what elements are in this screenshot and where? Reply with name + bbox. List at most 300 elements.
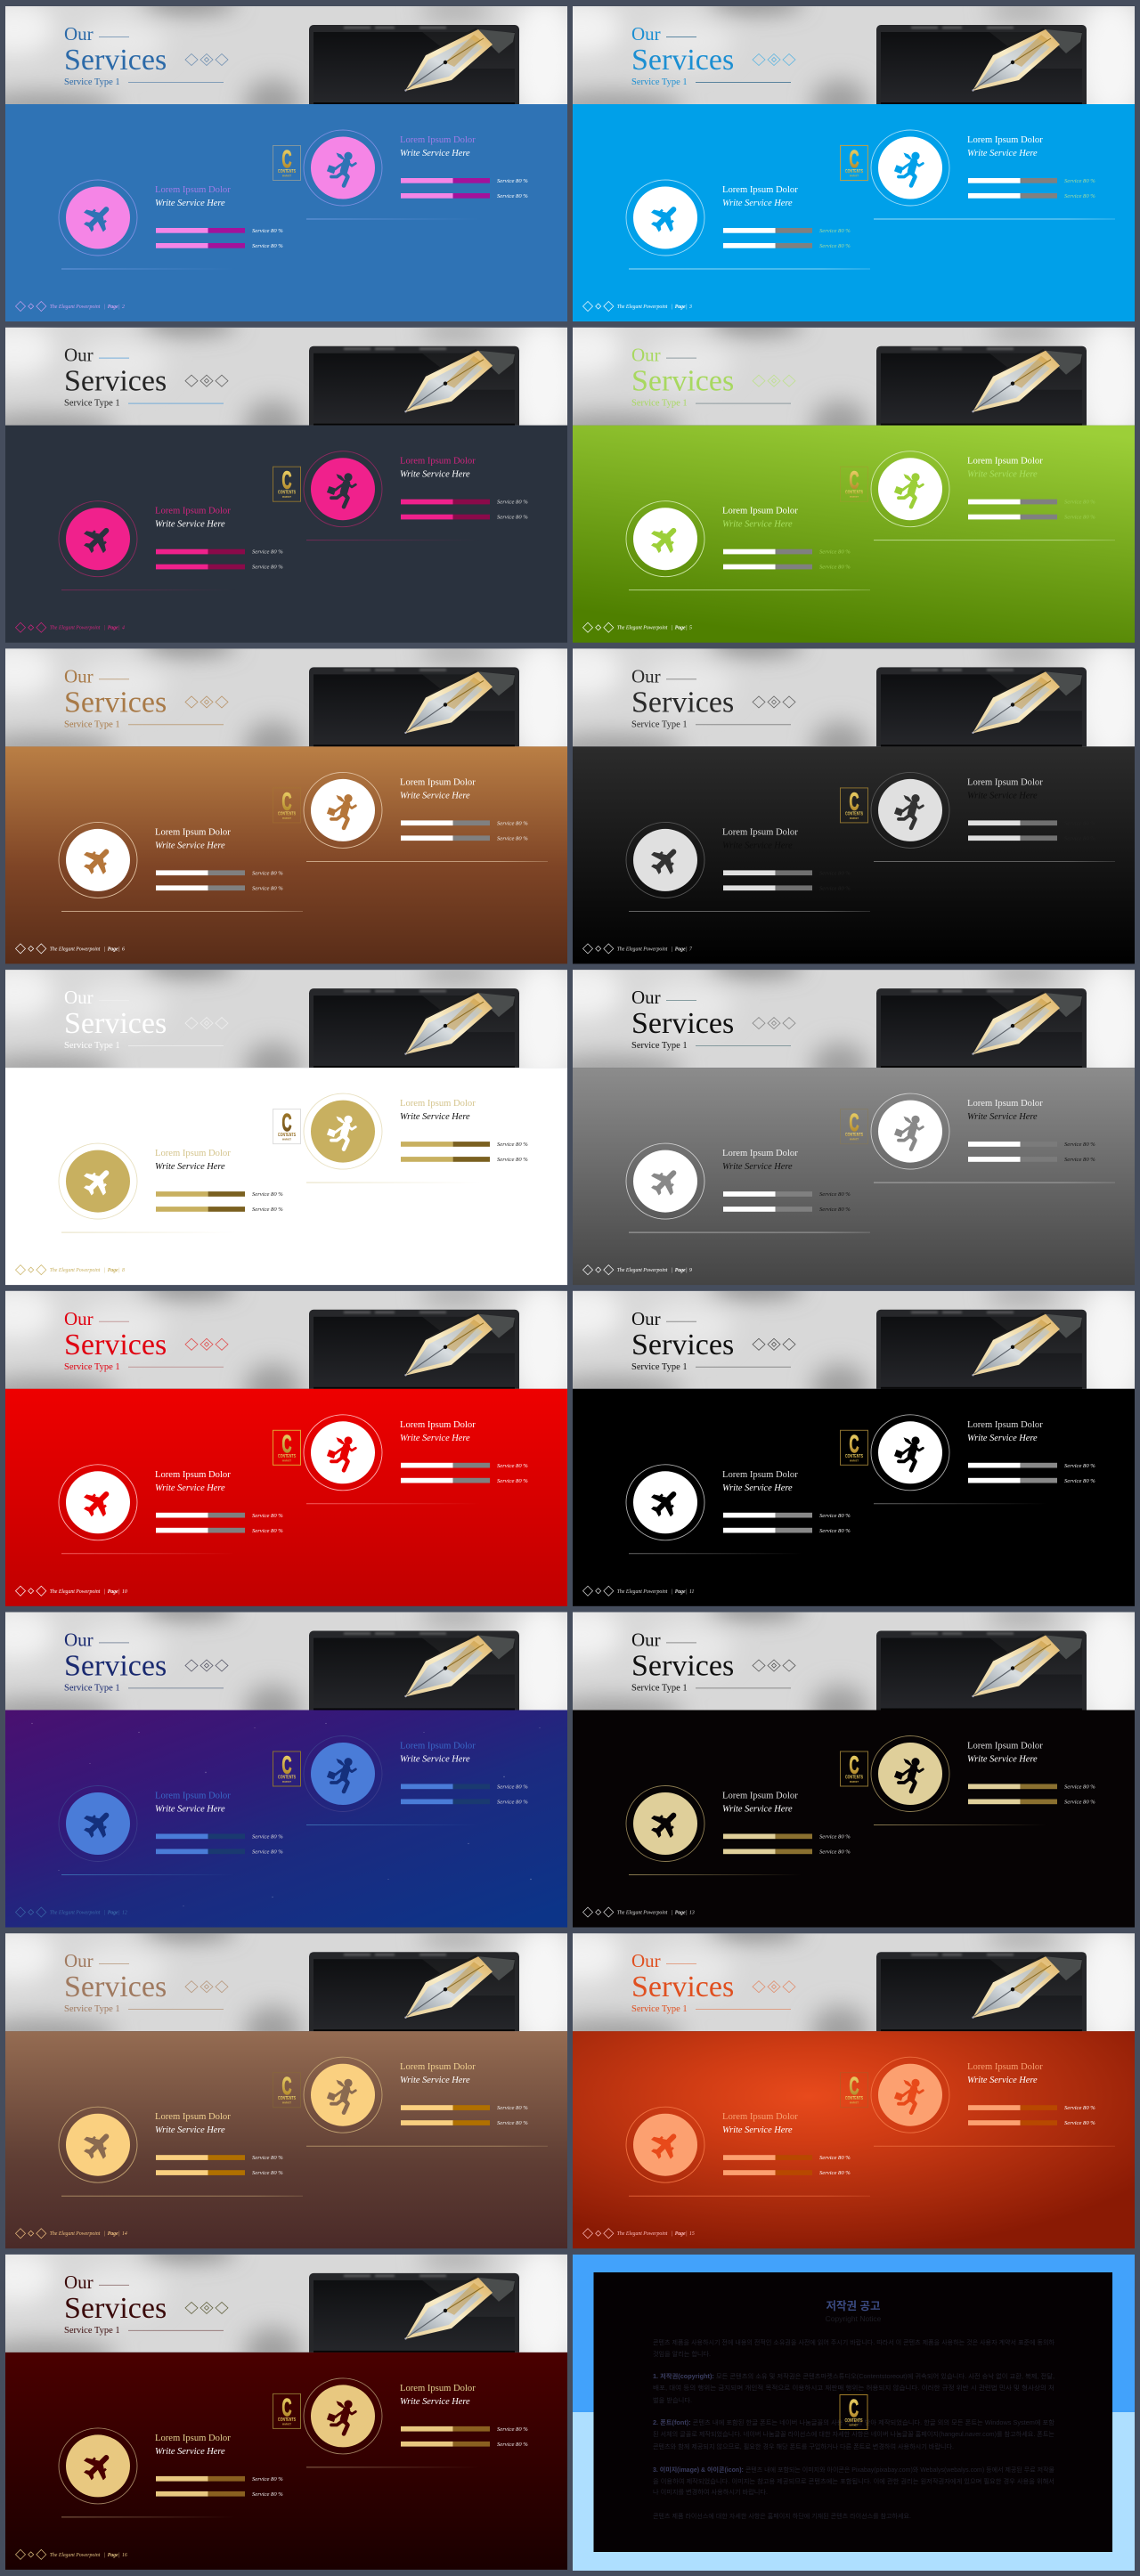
runner badge bbox=[871, 1736, 949, 1811]
heading: Lorem Ipsum Dolor bbox=[155, 827, 231, 837]
progress bars: Service 80 % bbox=[819, 1849, 851, 1856]
logo: MARKET bbox=[282, 1780, 291, 1784]
title block: Our bbox=[631, 1950, 661, 1971]
runner badge bbox=[304, 451, 382, 527]
title block: Service Type 1 bbox=[64, 719, 120, 729]
progress bars: Service 80 % bbox=[819, 1513, 851, 1519]
title block bbox=[64, 665, 224, 729]
title block: Service Type 1 bbox=[64, 399, 120, 409]
logo: C bbox=[850, 1430, 859, 1458]
progress bars: Service 80 % bbox=[252, 2476, 283, 2483]
title block: Services bbox=[64, 2292, 167, 2325]
logo: C bbox=[281, 145, 292, 173]
title block bbox=[631, 665, 791, 729]
laptop with pen nib bbox=[309, 988, 519, 1068]
body panel bbox=[573, 1389, 1135, 1606]
title block bbox=[631, 23, 791, 87]
progress bars: Service 80 % bbox=[497, 2426, 528, 2433]
plane badge bbox=[59, 180, 137, 256]
footer: | bbox=[686, 947, 688, 952]
laptop with pen nib bbox=[876, 1631, 1087, 1710]
heading: Lorem Ipsum Dolor bbox=[155, 1470, 231, 1480]
subtitle: Write Service Here bbox=[400, 1112, 470, 1122]
subtitle: Write Service Here bbox=[400, 1434, 470, 1443]
header background bbox=[542, 636, 1140, 771]
header background bbox=[542, 957, 1140, 1093]
notice body text: 것임을 알리는 합니다. bbox=[653, 2350, 711, 2358]
service block: plane bbox=[626, 180, 870, 269]
service block: plane bbox=[626, 822, 870, 912]
title block: Our bbox=[631, 345, 661, 366]
footer: The Elegant Powerpoint bbox=[617, 947, 668, 952]
laptop with pen nib bbox=[309, 1631, 519, 1710]
title block bbox=[64, 345, 224, 409]
laptop with pen nib bbox=[876, 346, 1087, 426]
heading: Lorem Ipsum Dolor bbox=[155, 185, 231, 195]
runner badge bbox=[304, 1736, 382, 1811]
heading: Lorem Ipsum Dolor bbox=[722, 185, 798, 195]
service block: plane bbox=[59, 1465, 303, 1554]
logo bbox=[841, 467, 867, 501]
footer: Page bbox=[675, 2231, 686, 2237]
title block: Services bbox=[64, 1329, 167, 1361]
body panel bbox=[573, 104, 1135, 321]
slide: page 15 orange bbox=[542, 1921, 1140, 2248]
footer: 3 bbox=[688, 305, 692, 310]
footer bbox=[16, 2229, 127, 2239]
footer bbox=[582, 301, 692, 312]
title block: Services bbox=[631, 44, 734, 77]
service block: runner bbox=[871, 1093, 1115, 1183]
title block: Our bbox=[631, 1629, 661, 1651]
logo: CONTENTS bbox=[845, 491, 863, 496]
plane badge bbox=[626, 180, 704, 256]
footer: The Elegant Powerpoint bbox=[617, 626, 668, 631]
plane badge bbox=[626, 1465, 704, 1540]
subtitle: Write Service Here bbox=[400, 1754, 470, 1765]
diamond ornament bbox=[185, 53, 228, 66]
notice body text: 된 서체의 글꼴로 제작되었습니다. 네이버 나눔글꼴 라이선스에 대한 자세한 사항은 네이버 나눔글꼴 홈페이지(hangeul.naver.com)를 참고하세요. 폰트는 bbox=[653, 2430, 1055, 2438]
service block: plane bbox=[626, 501, 870, 590]
service block: runner bbox=[304, 2378, 548, 2467]
footer: 6 bbox=[122, 947, 125, 952]
footer: Page bbox=[108, 626, 118, 631]
notice body text: 콘텐츠 제품을 사용하시기 전에 내용의 전적인 소유권을 사전에 읽어 주시기 바랍니다. 따라서 이 콘텐츠 제품을 사용하는 것은 사용자 계약서 표준에 동의하 bbox=[653, 2338, 1055, 2346]
progress bars: Service 80 % bbox=[1064, 193, 1095, 199]
title block: Service Type 1 bbox=[64, 2326, 120, 2336]
footer: Page bbox=[675, 1911, 686, 1916]
footer: Page bbox=[675, 1268, 686, 1273]
footer: Page bbox=[108, 1589, 118, 1595]
footer bbox=[16, 301, 125, 312]
footer: Page bbox=[675, 1589, 686, 1595]
title block: Services bbox=[631, 1007, 734, 1040]
progress bars: Service 80 % bbox=[252, 243, 283, 249]
footer bbox=[582, 1907, 695, 1917]
title block bbox=[64, 23, 224, 87]
logo bbox=[841, 1430, 867, 1465]
service block: runner bbox=[871, 451, 1115, 540]
two-tone blue backdrop bbox=[573, 2255, 1135, 2571]
slide: page 9 gray bbox=[542, 957, 1140, 1285]
progress bars: Service 80 % bbox=[497, 2105, 528, 2111]
footer: Page bbox=[108, 2231, 118, 2237]
footer bbox=[582, 1265, 692, 1275]
notice body text: 나 이미지를 변경하여 사용하시기 바랍니다. bbox=[653, 2488, 768, 2496]
progress bars: Service 80 % bbox=[497, 1463, 528, 1469]
plane badge bbox=[59, 501, 137, 577]
heading: Lorem Ipsum Dolor bbox=[722, 827, 798, 837]
logo bbox=[841, 145, 867, 180]
runner badge bbox=[871, 130, 949, 206]
subtitle: Write Service Here bbox=[722, 2125, 793, 2135]
progress bars: Service 80 % bbox=[819, 228, 851, 234]
progress bars: Service 80 % bbox=[819, 2170, 851, 2176]
diamond ornament bbox=[185, 1981, 228, 1993]
subtitle: Write Service Here bbox=[967, 791, 1038, 800]
title block bbox=[631, 1308, 791, 1372]
heading: Lorem Ipsum Dolor bbox=[155, 507, 231, 516]
logo: CONTENTS bbox=[845, 1776, 863, 1781]
heading: Lorem Ipsum Dolor bbox=[967, 777, 1043, 787]
title block: Our bbox=[64, 987, 94, 1008]
footer bbox=[16, 2549, 127, 2559]
header background bbox=[542, 1279, 1140, 1414]
title block: Services bbox=[631, 686, 734, 719]
title block: Service Type 1 bbox=[64, 1041, 120, 1051]
service block: runner bbox=[871, 1736, 1115, 1825]
service block: plane bbox=[59, 2107, 303, 2197]
title block: Service Type 1 bbox=[631, 399, 688, 409]
black notice panel bbox=[593, 2272, 1112, 2552]
title block: Service Type 1 bbox=[631, 77, 688, 87]
progress bars: Service 80 % bbox=[497, 835, 528, 841]
progress bars: Service 80 % bbox=[497, 515, 528, 521]
laptop with pen nib bbox=[876, 1952, 1087, 2031]
slide: page 3 cyan bbox=[542, 0, 1140, 321]
title block: Our bbox=[64, 2271, 94, 2293]
progress bars bbox=[723, 1191, 851, 1213]
logo: MARKET bbox=[850, 1459, 859, 1462]
title block bbox=[64, 1629, 224, 1694]
title block: Services bbox=[631, 1649, 734, 1683]
logo: CONTENTS bbox=[845, 811, 863, 817]
progress bars: Service 80 % bbox=[252, 2170, 283, 2176]
subtitle: Write Service Here bbox=[155, 841, 225, 850]
service block: plane bbox=[59, 1786, 303, 1875]
laptop with pen nib bbox=[876, 1310, 1087, 1389]
body panel bbox=[573, 1710, 1135, 1927]
footer: 10 bbox=[122, 1589, 127, 1595]
body panel bbox=[573, 426, 1135, 643]
logo: MARKET bbox=[850, 2424, 859, 2427]
laptop with pen nib bbox=[876, 988, 1087, 1068]
heading: Lorem Ipsum Dolor bbox=[400, 777, 476, 787]
slide: page 11 black bbox=[542, 1279, 1140, 1606]
logo bbox=[841, 2072, 867, 2108]
progress bars bbox=[968, 1463, 1095, 1484]
laptop with pen nib bbox=[309, 1310, 519, 1389]
logo bbox=[273, 2072, 301, 2108]
footer: Page bbox=[675, 626, 686, 631]
title block: Our bbox=[64, 1308, 94, 1329]
logo: MARKET bbox=[282, 495, 291, 499]
logo bbox=[273, 145, 301, 180]
footer: 12 bbox=[122, 1911, 127, 1916]
logo bbox=[273, 1109, 301, 1144]
footer bbox=[582, 944, 693, 954]
slide: page 4 charcoal and pink bbox=[0, 315, 580, 643]
logo: MARKET bbox=[282, 1138, 291, 1142]
footer: 14 bbox=[122, 2231, 127, 2237]
slide: copyright notice bbox=[573, 2255, 1135, 2571]
progress bars: Service 80 % bbox=[252, 1207, 283, 1213]
subtitle: Write Service Here bbox=[722, 1804, 793, 1815]
title block: Our bbox=[64, 665, 94, 687]
footer: The Elegant Powerpoint bbox=[50, 2553, 101, 2558]
logo: C bbox=[850, 2072, 859, 2100]
service block: runner bbox=[871, 772, 1115, 862]
diamond ornament bbox=[185, 2302, 228, 2313]
footer: The Elegant Powerpoint bbox=[617, 1268, 668, 1273]
progress bars bbox=[401, 1784, 528, 1806]
progress bars: Service 80 % bbox=[1064, 820, 1095, 826]
title block bbox=[631, 345, 791, 409]
header background bbox=[0, 315, 580, 451]
progress bars: Service 80 % bbox=[819, 565, 851, 571]
progress bars bbox=[401, 2426, 528, 2448]
title block bbox=[64, 1308, 224, 1372]
header background bbox=[0, 2242, 580, 2377]
runner badge bbox=[871, 2057, 949, 2133]
diamond ornament bbox=[185, 1338, 228, 1350]
title block: Services bbox=[631, 1329, 734, 1361]
header background bbox=[542, 1921, 1140, 2056]
subtitle: Write Service Here bbox=[155, 199, 225, 208]
progress bars bbox=[968, 820, 1095, 841]
logo: MARKET bbox=[850, 1138, 859, 1142]
heading: Lorem Ipsum Dolor bbox=[155, 2112, 231, 2122]
logo bbox=[841, 1109, 867, 1144]
progress bars: Service 80 % bbox=[1064, 500, 1095, 506]
notice body text: 1. 저작권(copyright): 모든 콘텐츠의 소유 및 저작권은 콘텐츠마켓스튜디오(Contentstoreout)에 귀속되어 있습니다. 사전 승낙 없이 교환, 복제, 전달, bbox=[653, 2372, 1054, 2380]
progress bars bbox=[723, 549, 851, 571]
subtitle: Write Service Here bbox=[967, 2076, 1038, 2085]
service block: plane bbox=[626, 1786, 870, 1875]
progress bars bbox=[156, 870, 283, 891]
footer: 8 bbox=[122, 1268, 125, 1273]
logo: CONTENTS bbox=[278, 491, 296, 496]
runner badge bbox=[871, 451, 949, 527]
footer: | bbox=[686, 1911, 688, 1916]
runner badge bbox=[871, 1093, 949, 1169]
title block bbox=[631, 1950, 791, 2014]
title block: Our bbox=[631, 987, 661, 1008]
progress bars: Service 80 % bbox=[252, 228, 283, 234]
heading: Lorem Ipsum Dolor bbox=[400, 135, 476, 145]
progress bars: Service 80 % bbox=[1064, 1784, 1095, 1790]
progress bars: Service 80 % bbox=[252, 1834, 283, 1840]
footer: Page bbox=[108, 305, 118, 310]
footer: | bbox=[686, 305, 688, 310]
progress bars: Service 80 % bbox=[819, 549, 851, 556]
body panel bbox=[573, 1068, 1135, 1285]
progress bars bbox=[968, 500, 1095, 521]
logo: CONTENTS bbox=[845, 1454, 863, 1459]
footer: | bbox=[672, 1911, 673, 1916]
progress bars: Service 80 % bbox=[819, 885, 851, 891]
footer: 7 bbox=[689, 947, 693, 952]
plane badge bbox=[59, 1143, 137, 1219]
notice body text: 콘텐츠와 함께 제공되지 않으므로, 필요한 경우 해당 폰트를 구입하거나 다른 폰트로 변경하여 사용하시기 바랍니다. bbox=[653, 2442, 954, 2450]
footer: The Elegant Powerpoint bbox=[50, 626, 101, 631]
title block bbox=[631, 987, 791, 1051]
heading: Lorem Ipsum Dolor bbox=[400, 457, 476, 467]
subtitle: Write Service Here bbox=[155, 1804, 225, 1815]
progress bars: Service 80 % bbox=[1064, 835, 1095, 841]
heading: Lorem Ipsum Dolor bbox=[722, 2112, 798, 2122]
title block: Our bbox=[64, 1950, 94, 1971]
progress bars bbox=[401, 178, 528, 199]
footer: | bbox=[118, 1911, 120, 1916]
service block: plane bbox=[626, 1465, 870, 1554]
footer: The Elegant Powerpoint bbox=[50, 1911, 101, 1916]
service block: runner bbox=[871, 2057, 1115, 2147]
notice body text: 2. 폰트(font): 콘텐츠 내에 포함된 한글 폰트는 네이버 나눔글꼴의 사용 허가를 받아 제작되었습니다. 한글 외의 모든 폰트는 Windows System에 포함 bbox=[653, 2418, 1055, 2426]
slide: page 6 brown bbox=[0, 636, 580, 963]
header background bbox=[0, 957, 580, 1093]
title block: Services bbox=[64, 1971, 167, 2003]
logo: MARKET bbox=[282, 175, 291, 178]
subtitle: Write Service Here bbox=[155, 1483, 225, 1493]
laptop with pen nib bbox=[309, 2273, 519, 2353]
footer: Page bbox=[108, 947, 118, 952]
notice body text: 벌을 받습니다. bbox=[653, 2396, 692, 2404]
footer bbox=[16, 622, 125, 632]
progress bars: Service 80 % bbox=[1064, 1478, 1095, 1484]
progress bars: Service 80 % bbox=[252, 885, 283, 891]
logo: MARKET bbox=[282, 1459, 291, 1462]
header background bbox=[0, 1279, 580, 1414]
footer: The Elegant Powerpoint bbox=[50, 2231, 101, 2237]
title block bbox=[64, 987, 224, 1051]
progress bars: Service 80 % bbox=[252, 1528, 283, 1534]
logo: CONTENTS bbox=[278, 1454, 296, 1459]
subtitle: Write Service Here bbox=[722, 520, 793, 530]
footer: 2 bbox=[122, 305, 125, 310]
logo: C bbox=[281, 1751, 292, 1779]
slide: page 7 black gradient bbox=[542, 636, 1140, 963]
footer: The Elegant Powerpoint bbox=[617, 1911, 668, 1916]
logo: CONTENTS bbox=[844, 2418, 863, 2424]
progress bars: Service 80 % bbox=[497, 193, 528, 199]
progress bars: Service 80 % bbox=[252, 2155, 283, 2161]
progress bars bbox=[156, 549, 283, 571]
progress bars: Service 80 % bbox=[497, 1157, 528, 1163]
progress bars: Service 80 % bbox=[252, 870, 283, 876]
body panel bbox=[5, 1068, 567, 1285]
footer: | bbox=[672, 1268, 673, 1273]
progress bars: Service 80 % bbox=[497, 178, 528, 184]
runner badge bbox=[304, 2378, 382, 2454]
subtitle: Write Service Here bbox=[967, 149, 1038, 158]
progress bars: Service 80 % bbox=[497, 2120, 528, 2126]
logo bbox=[841, 787, 867, 823]
footer: Page bbox=[675, 305, 686, 310]
logo: C bbox=[849, 2394, 859, 2422]
body panel bbox=[5, 1389, 567, 1606]
footer: | bbox=[672, 1589, 673, 1595]
logo: CONTENTS bbox=[278, 2096, 296, 2101]
footer: | bbox=[686, 2231, 688, 2237]
heading: Lorem Ipsum Dolor bbox=[400, 2062, 476, 2072]
title block: Service Type 1 bbox=[631, 719, 688, 729]
plane badge bbox=[626, 1143, 704, 1219]
logo: MARKET bbox=[850, 175, 859, 178]
header background bbox=[542, 315, 1140, 451]
heading: Lorem Ipsum Dolor bbox=[722, 1149, 798, 1158]
logo: C bbox=[281, 1430, 292, 1458]
footer: The Elegant Powerpoint bbox=[617, 2231, 668, 2237]
body panel bbox=[5, 104, 567, 321]
progress bars: Service 80 % bbox=[497, 500, 528, 506]
title block: Service Type 1 bbox=[631, 1041, 688, 1051]
service block: plane bbox=[626, 2107, 870, 2197]
subtitle: Write Service Here bbox=[722, 1162, 793, 1172]
header background bbox=[0, 0, 580, 129]
service block: runner bbox=[871, 130, 1115, 219]
footer: The Elegant Powerpoint bbox=[50, 947, 101, 952]
progress bars: Service 80 % bbox=[252, 565, 283, 571]
footer: | bbox=[686, 626, 688, 631]
logo: MARKET bbox=[850, 495, 859, 499]
progress bars: Service 80 % bbox=[819, 2155, 851, 2161]
progress bars bbox=[401, 1142, 528, 1163]
logo: CONTENTS bbox=[278, 2418, 296, 2423]
body panel bbox=[5, 746, 567, 963]
footer: Page bbox=[108, 1268, 118, 1273]
runner badge bbox=[304, 1093, 382, 1169]
progress bars bbox=[401, 1463, 528, 1484]
progress bars bbox=[968, 178, 1095, 199]
progress bars bbox=[156, 228, 283, 249]
progress bars bbox=[156, 1834, 283, 1856]
title block: Our bbox=[631, 665, 661, 687]
heading: Lorem Ipsum Dolor bbox=[155, 1792, 231, 1800]
title block: Services bbox=[631, 1971, 734, 2003]
heading: Lorem Ipsum Dolor bbox=[722, 507, 798, 516]
logo: C bbox=[850, 787, 859, 815]
slide: page 5 green bbox=[542, 315, 1140, 643]
heading: Lorem Ipsum Dolor bbox=[722, 1792, 798, 1800]
footer: 9 bbox=[689, 1268, 692, 1273]
progress bars: Service 80 % bbox=[819, 1207, 851, 1213]
footer: 4 bbox=[122, 625, 125, 631]
slide: page 16 maroon bbox=[0, 2242, 580, 2570]
progress bars: Service 80 % bbox=[1064, 178, 1095, 184]
title block: Services bbox=[631, 365, 734, 398]
progress bars: Service 80 % bbox=[497, 2442, 528, 2448]
logo: CONTENTS bbox=[845, 1133, 863, 1138]
footer: 5 bbox=[689, 626, 692, 631]
progress bars bbox=[156, 2155, 283, 2176]
subtitle: Write Service Here bbox=[400, 470, 470, 480]
header background bbox=[0, 1921, 580, 2056]
footer: | bbox=[118, 947, 120, 952]
title block: Services bbox=[64, 1007, 167, 1040]
progress bars bbox=[968, 1142, 1095, 1163]
laptop with pen nib bbox=[309, 667, 519, 746]
